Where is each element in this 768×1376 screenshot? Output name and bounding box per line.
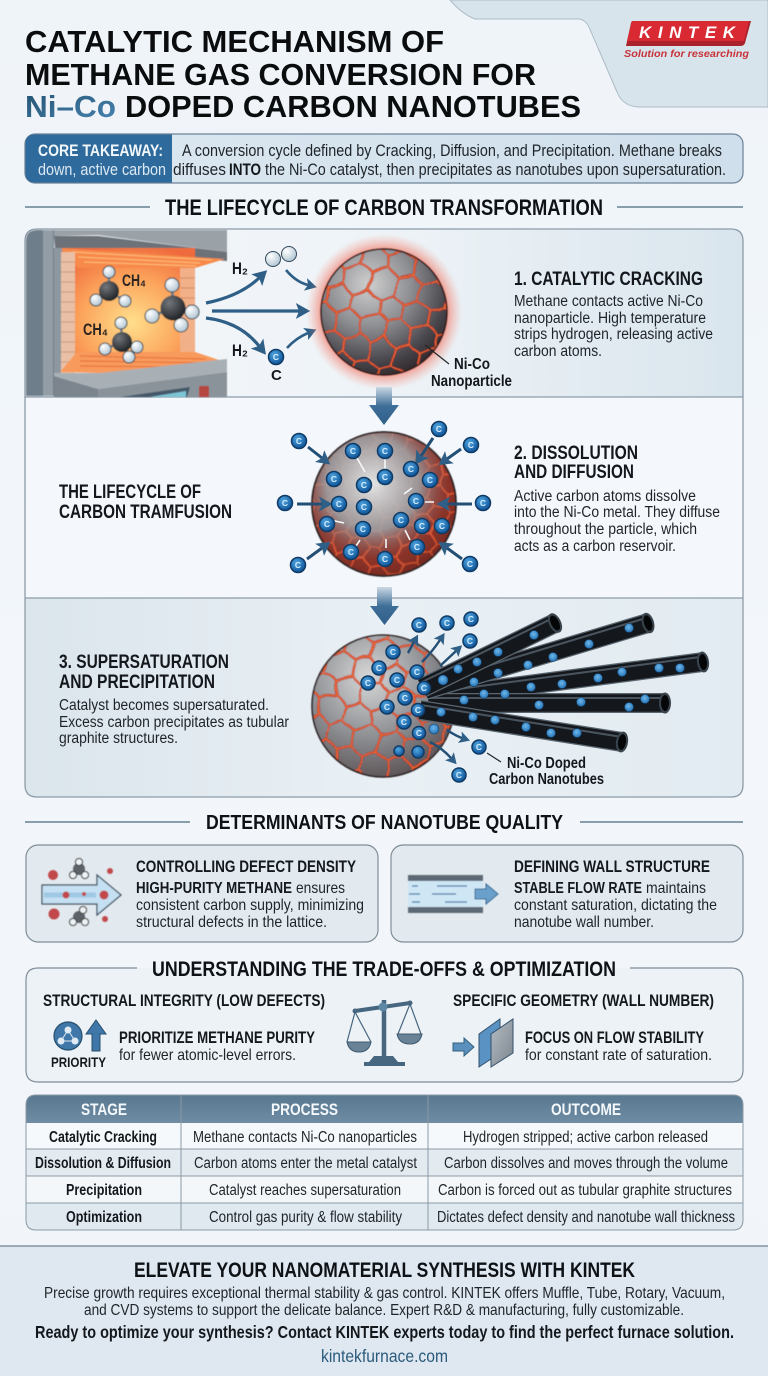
carbon atoms: diffusing: C (324, 519, 330, 529)
card text: wall structure: STABLE FLOW RATE (514, 880, 642, 897)
text: step 2 (514, 442, 720, 555)
footer call to action (0, 1246, 768, 1376)
arrows: cracking products (206, 270, 308, 348)
carbon atoms: diffusing: C (413, 496, 419, 506)
table rows (26, 1123, 743, 1230)
label: priority: PRIORITY (51, 1054, 107, 1070)
row: precipitation: Catalyst reaches supersaturation (209, 1182, 401, 1199)
card text: wall structure: constant saturation, dictating the (514, 897, 717, 914)
text: lifecycle label: CARBON TRAMFUSION (59, 501, 232, 523)
label: Ni-Co doped carbon nanotubes (487, 753, 604, 788)
icon: priority molecule and up arrow (54, 1020, 106, 1051)
carbon atoms: precipitating: C (384, 702, 390, 712)
text: prioritize methane purity: PRIORITIZE METHANE PURITY (119, 1029, 315, 1047)
carbon atoms: diffusing: C (331, 474, 337, 484)
label: H2 upper: H₂ (232, 259, 248, 278)
row: dissolution and diffusion: Carbon atoms enter the metal catalyst (194, 1155, 418, 1172)
core takeaway callout: INTO (229, 161, 261, 179)
carbon atoms: precipitating: C (365, 678, 371, 688)
row: dissolution and diffusion (35, 1155, 728, 1172)
website: kintekfurnace.com (321, 1346, 448, 1366)
icon: carbon atom (268, 350, 284, 364)
label: CH4 lower: CH₄ (83, 320, 108, 339)
card text: defect density: HIGH-PURITY METHANE (136, 880, 292, 897)
icon: flow into walls (453, 1019, 513, 1067)
nanotube 3 (428, 651, 710, 698)
carbon dots inside nanotubes (436, 624, 684, 738)
carbon atoms: precipitating (361, 612, 486, 782)
carbon atoms: precipitating: C (415, 705, 421, 715)
header corner shape (450, 0, 768, 107)
row: optimization: Optimization (66, 1209, 142, 1226)
arrow: step 1 to step 2 (369, 387, 399, 425)
icon: nanotube flow (408, 875, 498, 913)
carbon atoms: precipitating: C (421, 683, 427, 693)
text: lifecycle label (59, 481, 232, 523)
text: step 3: 3. SUPERSATURATION (59, 651, 229, 673)
text: step 2: acts as a carbon reservoir. (514, 538, 676, 555)
title: METHANE GAS CONVERSION FOR (25, 57, 536, 92)
carbon atoms: precipitating: C (394, 675, 400, 685)
card text: wall structure: nanotube wall number. (514, 914, 654, 931)
arrow: step 2 to step 3 (370, 587, 399, 625)
text: step 3: AND PRECIPITATION (59, 671, 215, 693)
row: optimization: Control gas purity & flow stability (209, 1209, 402, 1226)
carbon atoms: diffusing: C (382, 472, 388, 482)
text: step 2: Active carbon atoms dissolve (514, 488, 696, 505)
row: precipitation (66, 1182, 732, 1199)
carbon atoms: diffusing: C (360, 524, 366, 534)
row: precipitation: Precipitation (66, 1182, 142, 1199)
panel 2: dissolution background (25, 397, 743, 598)
section heading: determinants: DETERMINANTS OF NANOTUBE QUALITY (206, 811, 563, 834)
row: optimization (66, 1209, 735, 1226)
illustration: particle with dissolving carbon (310, 430, 458, 578)
core takeaway callout: diffuses (173, 161, 226, 179)
subheading: structural integrity: STRUCTURAL INTEGRITY (LOW DEFECTS) (43, 991, 325, 1010)
logo: KINTEK: KINTEK (639, 23, 737, 42)
carbon atoms: diffusing: C (468, 440, 474, 450)
carbon atoms: diffusing: C (336, 499, 342, 509)
label: CH4 upper: CH₄ (122, 271, 146, 290)
carbon atoms: precipitating: C (467, 636, 473, 646)
card text: wall structure: maintains (646, 880, 706, 897)
arrows: carbon leaving (408, 640, 462, 758)
carbon atoms: diffusing: C (296, 436, 302, 446)
panel 1: catalytic cracking background (25, 229, 743, 397)
text: step 2: 2. DISSOLUTION (514, 442, 638, 464)
carbon atoms: diffusing (278, 422, 490, 572)
panel: controlling defect density (26, 845, 378, 942)
carbon atoms: precipitating: C (456, 770, 462, 780)
carbon atoms: diffusing: C (414, 542, 420, 552)
subheading: specific geometry: SPECIFIC GEOMETRY (WALL NUMBER) (453, 991, 714, 1010)
text: prioritize methane purity: for fewer atomic-level errors. (119, 1047, 296, 1064)
carbon atoms: precipitating: C (476, 742, 482, 752)
table grid (26, 1095, 743, 1230)
text: lifecycle label: THE LIFECYCLE OF (59, 481, 201, 503)
carbon atoms: diffusing: C (427, 475, 433, 485)
illustration: Ni-Co nanoparticle glowing (306, 234, 462, 390)
footer body text (44, 1285, 725, 1319)
carbon atoms: diffusing: C (419, 521, 425, 531)
text: focus on flow stability (525, 1029, 712, 1064)
carbon atoms: precipitating: C (444, 618, 450, 628)
carbon atoms: diffusing: C (361, 480, 367, 490)
core takeaway callout: CORE TAKEAWAY: (38, 141, 163, 160)
text: focus on flow stability: for constant rate of saturation. (525, 1047, 712, 1064)
text: step 1: nanoparticle. High temperature (514, 310, 706, 327)
row: catalytic cracking: Catalytic Cracking (49, 1129, 157, 1146)
text: step 3: Catalyst becomes supersaturated. (59, 697, 269, 714)
carbon atoms: diffusing: C (436, 424, 442, 434)
text: step 1: carbon atoms. (514, 343, 602, 360)
carbon atoms: precipitating: C (376, 663, 382, 673)
table header: OUTCOME (551, 1100, 621, 1119)
nanotube 1 (420, 611, 565, 688)
panel: trade-offs and optimization (26, 957, 743, 1082)
footer body text: and CVD systems to support the delicate balance. Expert R&D & manufacturing, fully customizable. (84, 1302, 684, 1319)
text: focus on flow stability: FOCUS ON FLOW STABILITY (525, 1029, 704, 1047)
nanotube 2 (424, 611, 657, 690)
text: step 2: throughout the particle, which (514, 521, 697, 538)
logo: KINTEK: Solution for researching (624, 48, 750, 60)
label: C: C (271, 367, 282, 384)
icon: methane molecule top (90, 266, 131, 307)
arrows: carbon entering (297, 438, 472, 559)
icon: hydrogen molecule (266, 246, 296, 266)
carbon atoms: diffusing: C (382, 446, 388, 456)
label: Ni-Co doped carbon nanotubes: Ni-Co Doped (507, 755, 586, 772)
label: Ni-Co nanoparticle: Ni-Co (454, 356, 490, 373)
panel frame (25, 229, 743, 797)
row: catalytic cracking (49, 1129, 708, 1146)
panel 3: precipitation background (25, 598, 743, 797)
text: step 1: 1. CATALYTIC CRACKING (514, 268, 703, 290)
carbon atoms: precipitating: C (414, 667, 420, 677)
icon: balance scale (347, 1000, 422, 1066)
nanotube 4 (430, 692, 671, 714)
icon: carbon atom: C (273, 352, 279, 362)
text: step 1: Methane contacts active Ni-Co (514, 293, 703, 310)
label: Ni-Co doped carbon nanotubes: Carbon Nanotubes (489, 771, 604, 788)
illustration: particle growing nanotubes (310, 633, 453, 779)
title: DOPED CARBON NANOTUBES (125, 89, 581, 124)
illustration: furnace (26, 230, 227, 397)
row: catalytic cracking: Methane contacts Ni-Co nanoparticles (193, 1129, 417, 1146)
title: Ni–Co (25, 89, 116, 124)
label: Ni-Co nanoparticle (425, 345, 512, 390)
card text: defect density: CONTROLLING DEFECT DENSITY (136, 857, 357, 876)
carbon atoms: precipitating: C (402, 693, 408, 703)
table header: PROCESS (271, 1100, 338, 1119)
carbon atoms: diffusing: C (282, 498, 288, 508)
text: step 2: into the Ni-Co metal. They diffuse (514, 504, 720, 521)
table header (26, 1095, 743, 1123)
carbon atoms: diffusing: C (348, 547, 354, 557)
text: step 1: strips hydrogen, releasing active (514, 326, 713, 343)
panel: lifecycle stages (25, 229, 743, 797)
carbon atoms: precipitating: C (416, 620, 422, 630)
nanotube 5 (420, 705, 630, 753)
carbon atoms: diffusing: C (382, 554, 388, 564)
text: step 3 (59, 651, 289, 747)
card text: defect density: structural defects in the lattice. (136, 914, 327, 931)
logo: KINTEK (624, 21, 751, 60)
label: H2 lower: H₂ (232, 341, 248, 360)
section heading: lifecycle: THE LIFECYCLE OF CARBON TRANSFORMATION (165, 195, 603, 220)
card text: defect density (136, 857, 364, 931)
core takeaway callout (25, 134, 743, 183)
carbon atoms: diffusing: C (361, 502, 367, 512)
label: Ni-Co nanoparticle: Nanoparticle (431, 373, 512, 390)
carbon atoms: diffusing: C (439, 521, 445, 531)
core takeaway callout: down, active carbon (38, 161, 166, 179)
heading: trade-offs: UNDERSTANDING THE TRADE-OFFS & OPTIMIZATION (152, 957, 616, 981)
carbon atoms: diffusing: C (467, 559, 473, 569)
table header: STAGE (81, 1100, 127, 1119)
panel: defining wall structure (391, 845, 743, 942)
carbon atoms: diffusing: C (398, 515, 404, 525)
illustration: carbon nanotubes (420, 611, 710, 753)
text: step 3: Excess carbon precipitates as tubular (59, 714, 289, 731)
carbon atoms: precipitating: C (468, 614, 474, 624)
card text: defect density: ensures (296, 880, 345, 897)
carbon atoms: diffusing: C (295, 560, 301, 570)
carbon atoms: diffusing: C (350, 446, 356, 456)
card text: defect density: consistent carbon supply, minimizing (136, 897, 364, 914)
text: step 2: AND DIFFUSION (514, 461, 634, 483)
carbon atoms: diffusing: C (408, 464, 414, 474)
carbon atoms: diffusing: C (480, 498, 486, 508)
carbon atoms: precipitating: C (401, 717, 407, 727)
carbon atoms: precipitating: C (416, 728, 422, 738)
title: CATALYTIC MECHANISM OF (25, 24, 444, 59)
text: step 3: graphite structures. (59, 730, 178, 747)
row: catalytic cracking: Hydrogen stripped; active carbon released (463, 1129, 708, 1146)
card text: wall structure: DEFINING WALL STRUCTURE (514, 857, 710, 876)
card text: wall structure (514, 857, 717, 931)
text: step 1 (514, 268, 713, 360)
comparison table (26, 1095, 743, 1230)
row: dissolution and diffusion: Dissolution & Diffusion (35, 1155, 171, 1172)
icon: methane molecule large (145, 278, 199, 332)
carbon atoms: precipitating: C (390, 647, 396, 657)
icon: methane molecule bottom (99, 317, 143, 363)
icon: purity arrow (42, 858, 121, 926)
footer heading: ELEVATE YOUR NANOMATERIAL SYNTHESIS WITH KINTEK (134, 1259, 635, 1282)
text: prioritize methane purity (119, 1029, 315, 1064)
title (25, 24, 581, 124)
